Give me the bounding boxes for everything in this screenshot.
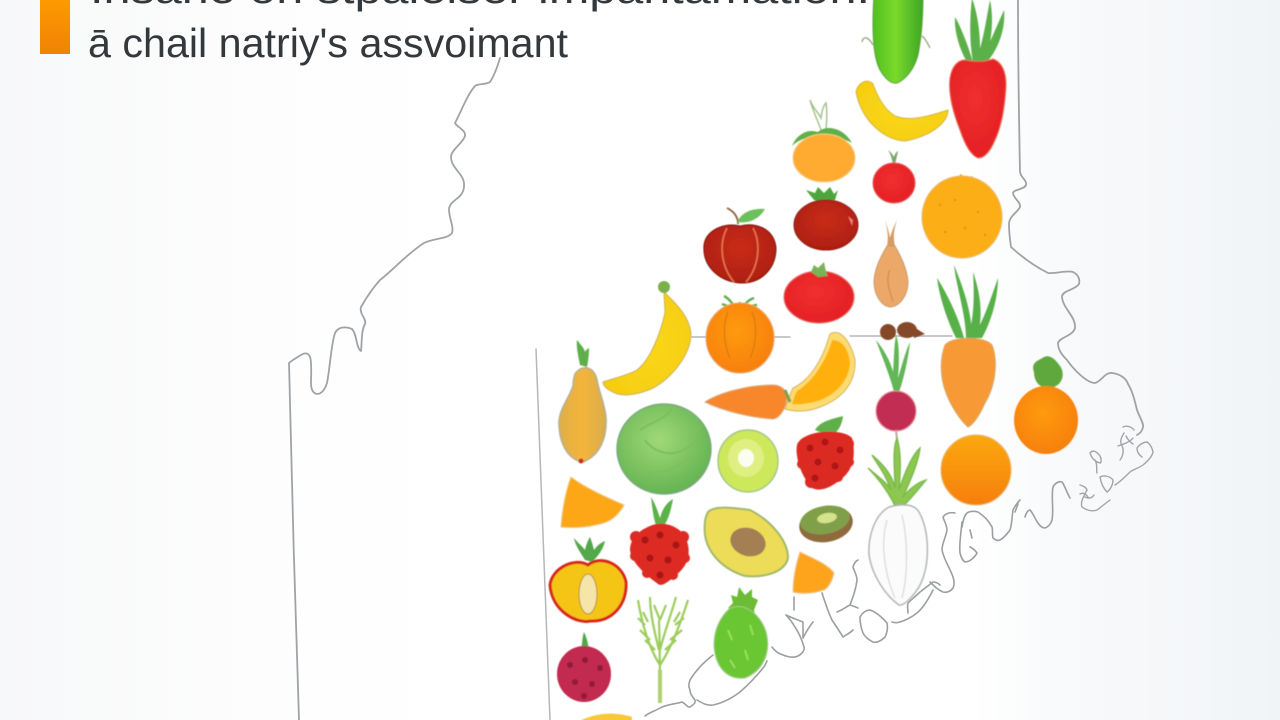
orange with curly leaves bbox=[1014, 356, 1078, 454]
orange with leaves bbox=[792, 100, 855, 182]
halved peach bbox=[550, 537, 626, 621]
yellow crescent banana bbox=[856, 81, 948, 141]
raspberry bbox=[557, 632, 611, 702]
avocado bbox=[705, 508, 788, 576]
dense squiggle cluster at eastern end bbox=[1080, 426, 1153, 511]
long banana bbox=[603, 281, 691, 395]
cabbage bbox=[617, 404, 711, 494]
pumpkin orange bbox=[706, 296, 774, 373]
orange wedge bbox=[561, 477, 624, 528]
title: second line: ā chail natriy's assvoimant bbox=[88, 20, 569, 66]
red tomato bbox=[784, 262, 854, 323]
kiwi bbox=[796, 502, 856, 546]
red raspberry with leaves bbox=[630, 497, 690, 585]
white bulb with greens bbox=[868, 438, 927, 605]
strawberry bbox=[797, 416, 854, 490]
green herb bbox=[638, 597, 688, 703]
small orange wedge bbox=[793, 552, 834, 593]
red carrot bbox=[950, 0, 1006, 158]
lime slice bbox=[718, 430, 778, 492]
spotted orange bbox=[922, 174, 1002, 258]
red apple bbox=[704, 208, 776, 283]
green pineapple bbox=[714, 587, 768, 678]
cucumber bbox=[862, 0, 930, 83]
cut-off yellow fruit at bottom bbox=[578, 714, 632, 720]
small red fruit bbox=[873, 150, 915, 203]
papaya bbox=[559, 340, 606, 464]
round orange bbox=[941, 435, 1011, 505]
accent bar bbox=[40, 0, 70, 54]
fruit illustration bbox=[550, 0, 1078, 720]
map outline bbox=[289, 0, 1143, 720]
orange slice crescent bbox=[785, 332, 855, 411]
tall carrot bbox=[937, 265, 998, 427]
dark tomato bbox=[794, 187, 858, 250]
coastline squiggles bbox=[645, 482, 1070, 716]
onion seed bbox=[874, 220, 908, 307]
radish with sprouts bbox=[876, 322, 925, 440]
horizontal carrot bbox=[705, 385, 790, 419]
